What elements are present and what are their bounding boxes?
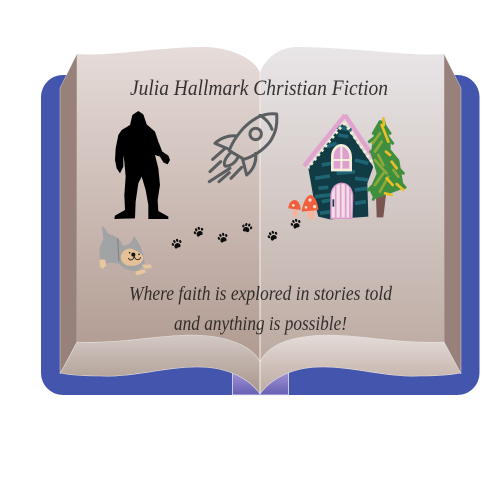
tagline: Where faith is explored in stories told (129, 283, 393, 305)
icon: fairy house (288, 115, 377, 219)
mushrooms (292, 210, 298, 217)
right lower page block (260, 335, 460, 394)
title: Julia Hallmark Christian Fiction (130, 75, 388, 100)
icon: dog (99, 226, 152, 275)
book cover (41, 75, 480, 395)
centre fold (259, 73, 261, 394)
tagline (129, 283, 393, 335)
door (331, 183, 353, 218)
house wall (308, 123, 373, 219)
tagline: and anything is possible! (174, 313, 347, 335)
roof trim (304, 115, 377, 166)
icon: pine tree (368, 117, 405, 217)
left page (77, 47, 260, 362)
trunk (376, 195, 386, 217)
left page edge (60, 54, 77, 374)
left lower page block (60, 335, 260, 394)
icon: rocket (209, 114, 277, 182)
right page edge (444, 54, 461, 374)
paw print trail (170, 218, 302, 250)
window (332, 145, 351, 170)
spine (232, 368, 288, 395)
right page (260, 47, 444, 362)
icon: bigfoot silhouette (114, 111, 170, 219)
foliage (369, 117, 404, 199)
